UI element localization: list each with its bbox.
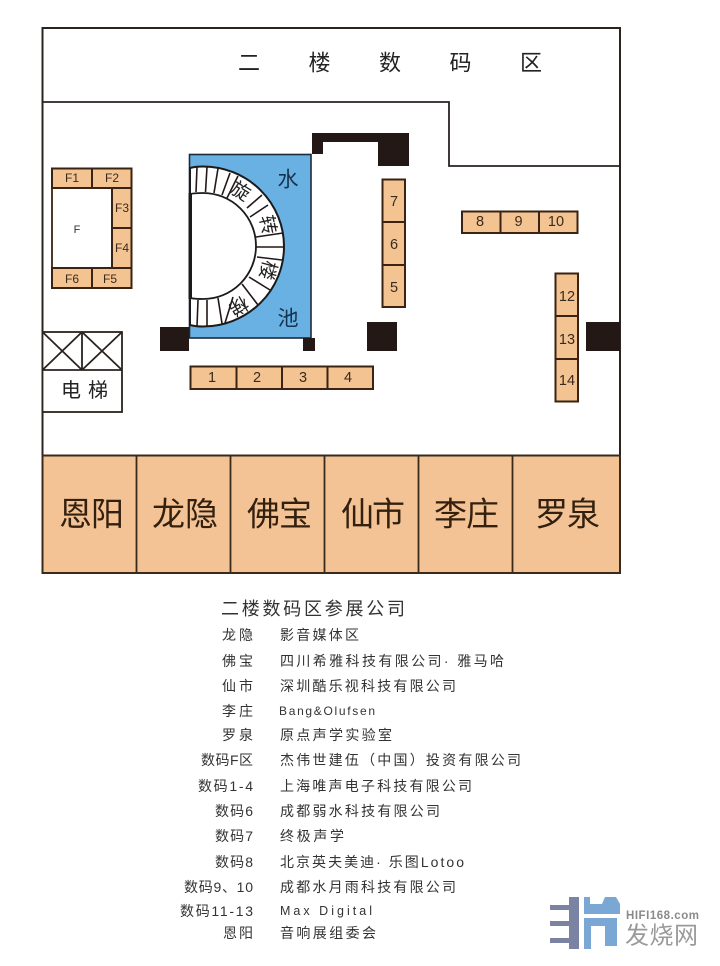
booth 1: 1	[208, 370, 216, 386]
stair label: 梯: 梯	[225, 291, 252, 320]
booths 8 to 10	[462, 212, 578, 233]
booth 13: 13	[559, 332, 575, 348]
row: 龙隐: 龙隐	[222, 627, 253, 643]
booth 9: 9	[514, 214, 523, 230]
booth 5: 5	[390, 280, 398, 296]
booth F2: F2	[105, 171, 119, 185]
hall: 龙隐: 龙隐	[152, 496, 218, 532]
stair label: 转: 转	[255, 213, 280, 236]
exhibitor list	[180, 599, 521, 941]
row: 李庄: Bang&Olufsen	[279, 704, 375, 718]
booth F1: F1	[65, 171, 79, 185]
row: 数码7: 终极声学	[280, 828, 344, 844]
row: 数码11-13: Max Digital	[280, 904, 372, 918]
spiral staircase	[188, 166, 284, 326]
structural pillars	[160, 133, 620, 351]
row: 数码6: 成都弱水科技有限公司	[280, 803, 440, 819]
booth 3: 3	[299, 370, 307, 386]
hall: 恩阳: 恩阳	[59, 496, 124, 532]
booth 6: 6	[390, 237, 398, 253]
row: 佛宝: 四川希雅科技有限公司· 雅马哈	[280, 653, 504, 669]
row: 数码8: 数码8	[215, 854, 253, 870]
logo mark	[550, 897, 620, 949]
row: 数码9、10: 数码9、10	[184, 879, 253, 895]
row: 罗泉: 原点声学实验室	[280, 727, 392, 743]
logo URL: HIFI168.com	[626, 910, 699, 922]
watermark logo	[550, 897, 699, 950]
row: 数码F区: 杰伟世建伍（中国）投资有限公司	[280, 752, 521, 768]
row: 数码11-13	[180, 903, 372, 919]
hall: 罗泉: 罗泉	[535, 496, 600, 532]
row: 数码6: 数码6	[215, 803, 253, 819]
stair label: 楼: 楼	[254, 258, 281, 282]
booths 7 to 5	[382, 180, 405, 307]
row: 罗泉: 罗泉	[222, 727, 253, 743]
panel: zone F booths: F	[74, 224, 81, 236]
row: 李庄: 李庄	[222, 703, 253, 719]
booth F6: F6	[65, 272, 79, 286]
row: 仙市: 仙市	[222, 678, 253, 694]
row: 李庄	[222, 703, 375, 719]
panel: zone F booths	[52, 168, 132, 288]
pool label: 池: 池	[278, 308, 298, 330]
booth 7: 7	[390, 194, 398, 210]
row: 数码1-4: 上海唯声电子科技有限公司	[280, 778, 472, 794]
hall: 李庄: 李庄	[434, 496, 499, 532]
row: 恩阳: 音响展组委会	[280, 925, 376, 941]
row: 数码1-4: 数码1-4	[198, 778, 253, 794]
row: 龙隐	[222, 627, 359, 643]
row: 佛宝: 佛宝	[222, 653, 253, 669]
row: 数码7: 数码7	[215, 828, 253, 844]
row: 恩阳: 恩阳	[223, 925, 253, 941]
row: 仙市: 深圳酷乐视科技有限公司	[280, 678, 456, 694]
booth 2	[236, 366, 282, 389]
row: 恩阳	[223, 925, 376, 941]
row: 数码9、10: 成都水月雨科技有限公司	[280, 879, 456, 895]
zone F centre	[52, 188, 112, 268]
stair label: 旋: 旋	[226, 177, 254, 206]
water pool	[190, 154, 311, 338]
row: 数码9、10	[184, 879, 456, 895]
pool label: 水: 水	[278, 168, 298, 192]
row: 数码8: 北京英夫美迪· 乐图Lotoo	[280, 854, 464, 870]
booth 3	[282, 366, 328, 389]
row: 数码F区: 数码F区	[201, 752, 253, 768]
logo name: 发烧网	[625, 922, 698, 950]
panel: water pool with spiral stairs	[188, 154, 311, 338]
booths 1 to 4	[190, 366, 373, 389]
booth 4	[328, 366, 373, 389]
booth 1	[190, 366, 236, 389]
row: 龙隐: 影音媒体区	[280, 627, 359, 643]
hall: 仙市: 仙市	[341, 496, 405, 532]
row: 数码7	[215, 828, 344, 844]
booth 2: 2	[253, 370, 261, 386]
booth 8: 8	[476, 214, 484, 230]
booth 14: 14	[559, 373, 575, 389]
panel: elevator	[42, 332, 122, 412]
booth 12: 12	[559, 289, 575, 305]
hall: 佛宝: 佛宝	[247, 496, 312, 532]
row: 罗泉	[222, 727, 392, 743]
row: 数码11-13: 数码11-13	[180, 903, 253, 919]
booth F3: F3	[115, 201, 129, 215]
booth F4: F4	[115, 241, 129, 255]
list heading: 二楼数码区参展公司	[221, 599, 405, 619]
booth F5: F5	[103, 272, 117, 286]
booth 4: 4	[344, 370, 352, 386]
elevator label: 电梯	[61, 379, 108, 402]
panel: large exhibition halls	[42, 455, 620, 573]
booths 12 to 14	[556, 274, 578, 402]
heading: second floor digital zone: 二楼数码区	[238, 50, 542, 76]
booth 10: 10	[548, 214, 564, 230]
